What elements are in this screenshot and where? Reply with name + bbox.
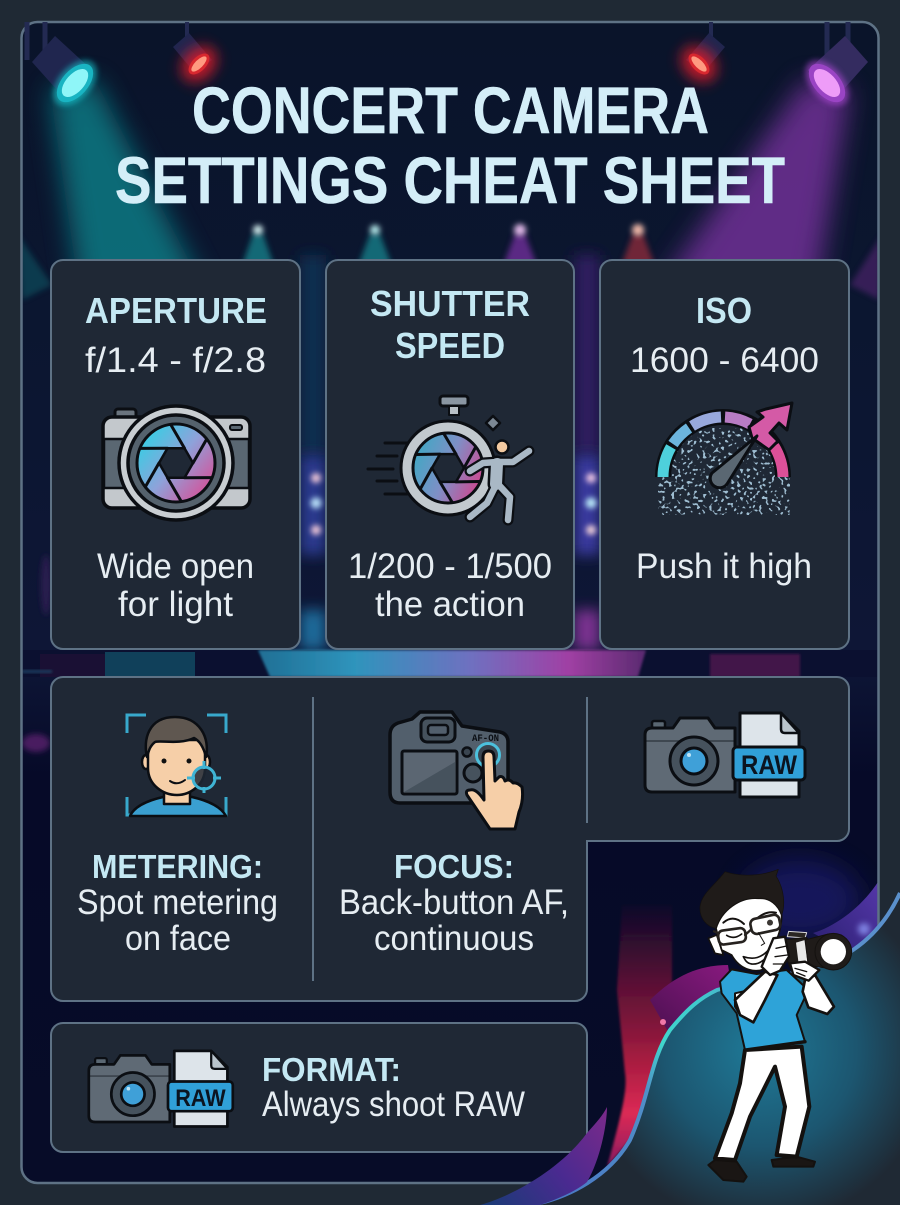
swoosh: purple	[813, 883, 878, 948]
icon: raw camera bottom: RAW	[175, 1085, 226, 1112]
icon: raw camera bottom	[89, 1051, 233, 1126]
spotlight: red left	[173, 22, 224, 89]
panel: shutter speed	[326, 260, 574, 649]
aperture caption	[97, 547, 254, 624]
metering label	[77, 848, 278, 958]
photographer character	[700, 869, 852, 1182]
focus label	[339, 848, 569, 958]
metering label: Spot metering	[77, 883, 278, 922]
heading: shutter speed: SHUTTER	[370, 283, 530, 324]
light beam: cyan	[38, 72, 206, 260]
bottom curve with teal glow	[530, 893, 900, 1205]
format label: FORMAT:	[262, 1051, 401, 1088]
curtain: red	[607, 905, 672, 1167]
icon: raw camera top: RAW	[741, 750, 797, 780]
metering label: on face	[125, 919, 231, 958]
panel: format	[51, 1023, 587, 1152]
icon: camera aperture	[103, 406, 250, 520]
lower body	[708, 969, 815, 1182]
aperture caption: for light	[118, 585, 233, 624]
format label: Always shoot RAW	[262, 1085, 525, 1124]
swoosh: magenta	[650, 965, 729, 1030]
iso caption: Push it high	[636, 547, 812, 586]
iso range: 1600 - 6400	[630, 341, 819, 380]
upper body	[700, 869, 852, 1022]
panel: aperture	[51, 260, 300, 649]
title	[115, 73, 785, 217]
icon: iso gauge with noise	[658, 403, 792, 516]
aperture caption: Wide open	[97, 547, 254, 586]
panel: metering and focus	[51, 677, 849, 1001]
shutter caption: 1/200 - 1/500	[348, 547, 552, 586]
focus label: continuous	[374, 919, 534, 958]
aperture range: f/1.4 - f/2.8	[85, 341, 266, 380]
shutter caption	[348, 547, 552, 624]
spotlight: cyan	[27, 22, 105, 114]
icon: metering face	[127, 715, 226, 816]
heading: shutter speed	[370, 283, 530, 366]
shutter caption: the action	[375, 585, 525, 624]
icon: stopwatch with runner	[368, 396, 529, 520]
heading: aperture: APERTURE	[85, 290, 267, 331]
heading: iso: ISO	[696, 290, 752, 331]
stage glow band	[22, 555, 879, 752]
light beam: purple	[660, 70, 862, 259]
focus label: Back-button AF,	[339, 883, 569, 922]
panel: iso	[600, 260, 849, 649]
glow behind photographer	[740, 860, 860, 940]
format label	[262, 1051, 525, 1124]
glow column and side lights	[300, 255, 600, 650]
icon: focus camera and hand	[390, 712, 523, 829]
title: SETTINGS CHEAT SHEET	[115, 143, 785, 217]
title: CONCERT CAMERA	[192, 73, 709, 147]
background stage lights	[242, 224, 655, 266]
icon: focus camera and hand: AF-ON	[472, 733, 499, 745]
focus label: FOCUS:	[394, 848, 514, 885]
heading: shutter speed: SPEED	[395, 325, 505, 366]
icon: raw camera top	[645, 713, 805, 797]
metering label: METERING:	[92, 848, 263, 885]
swoosh: bottom purple	[480, 1107, 607, 1205]
spotlight: purple	[797, 22, 868, 114]
spotlight: red right	[674, 22, 725, 89]
